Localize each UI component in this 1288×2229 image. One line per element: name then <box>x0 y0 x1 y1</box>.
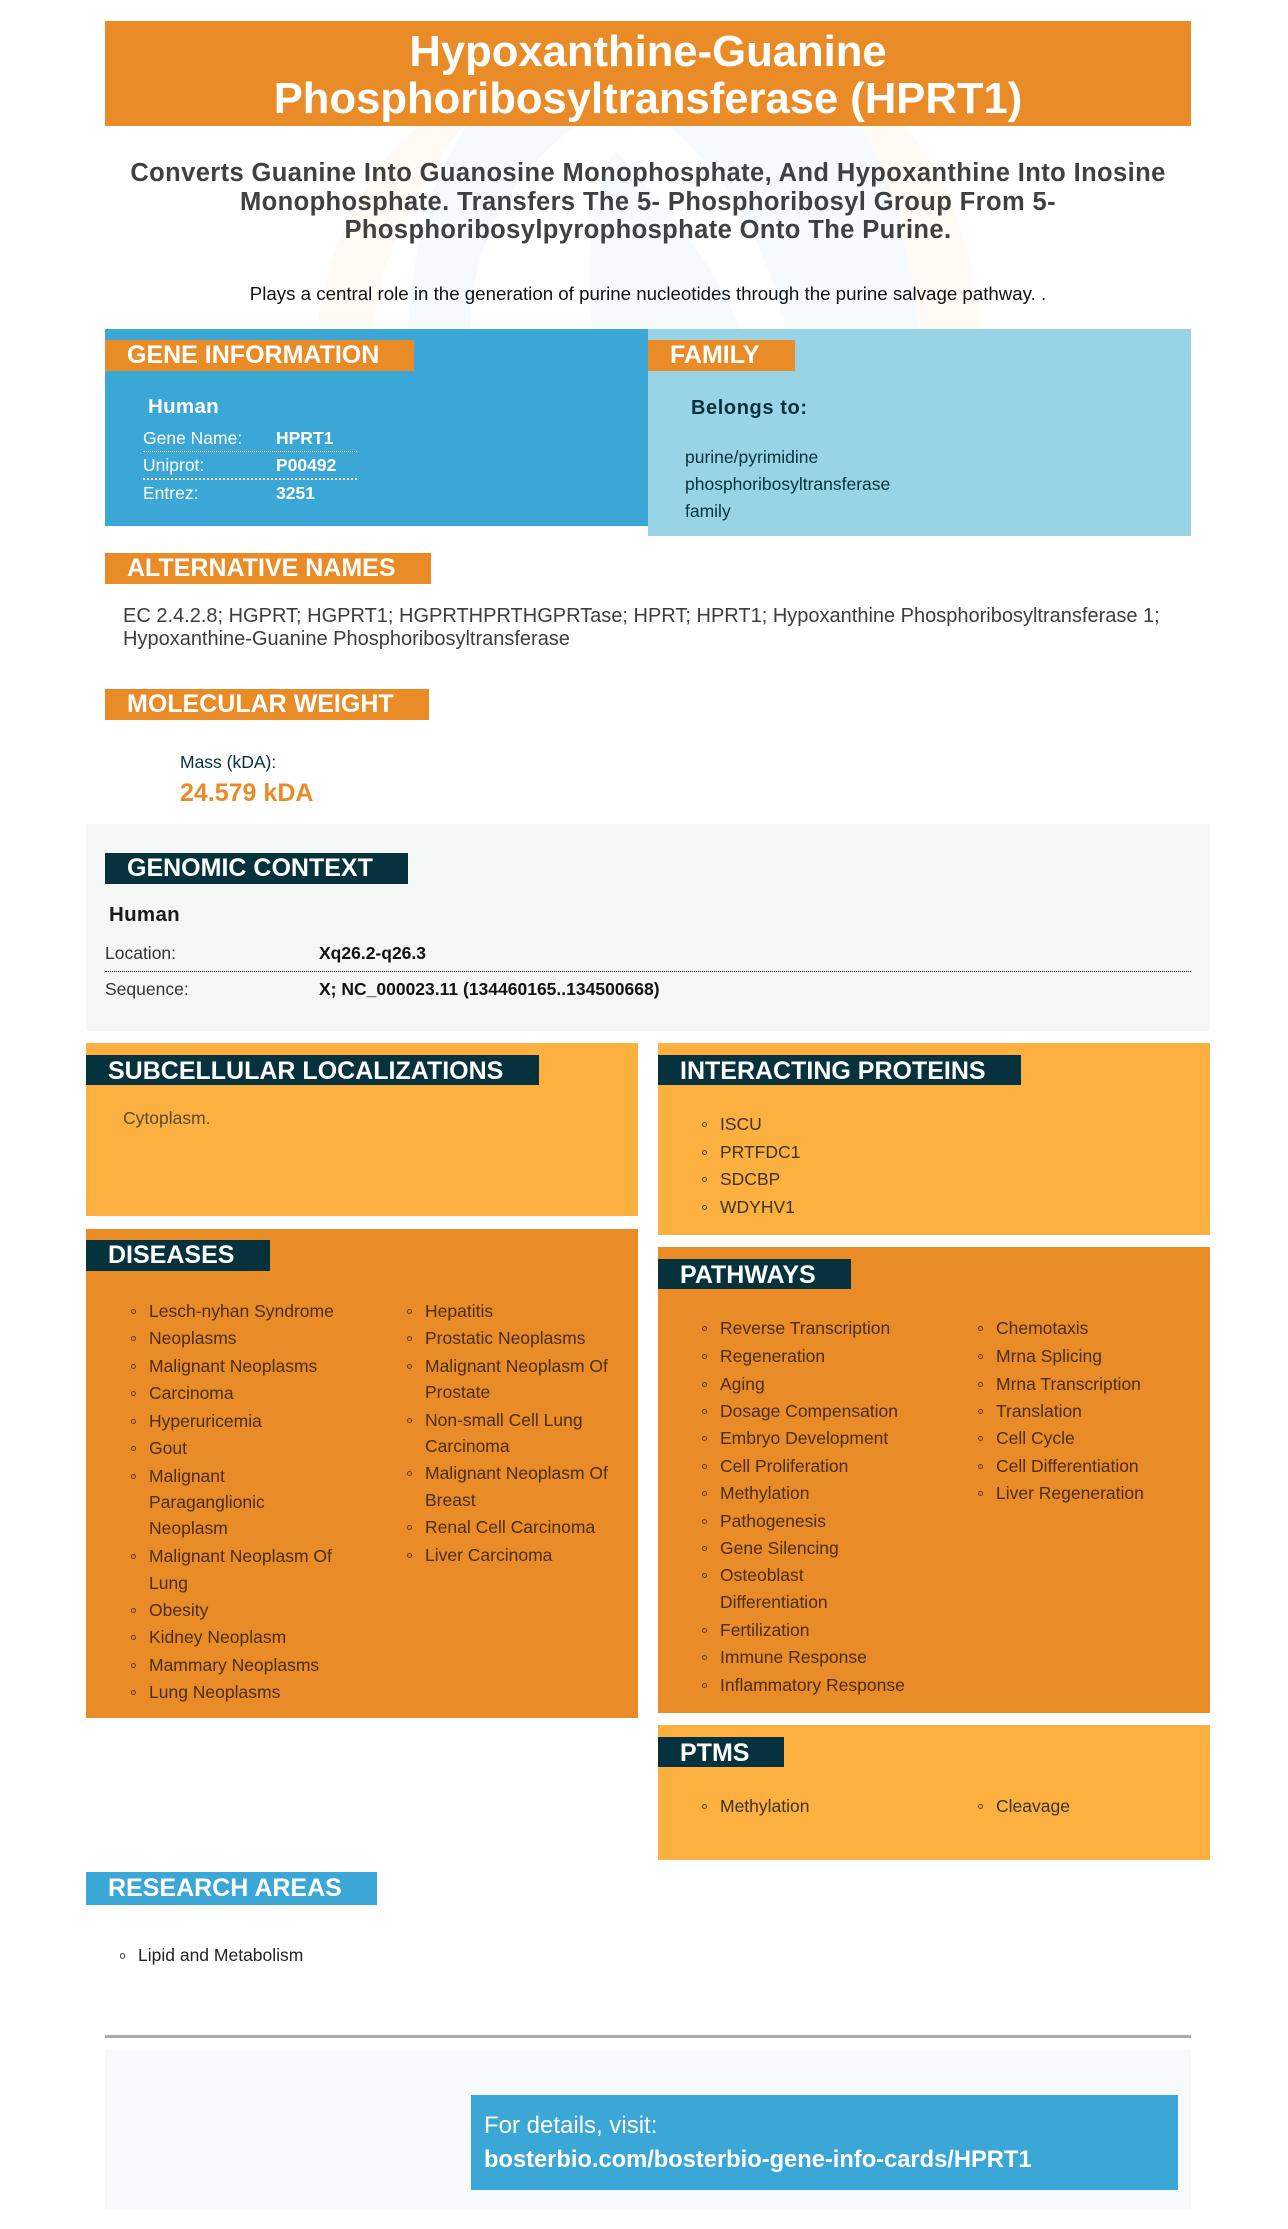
subtitle <box>130 159 1166 244</box>
alternative names text: EC 2.4.2.8; HGPRT; HGPRT1; HGPRTHPRTHGPRTase; HPRT; HPRT1; Hypoxanthine Phosphoribosyltransferase 1; <box>123 605 1160 627</box>
callout: visit link: bosterbio.com/bosterbio-gene-info-cards/HPRT1 <box>484 2147 1032 2173</box>
disease list: Malignant <box>149 1466 225 1486</box>
heading: diseases: DISEASES <box>108 1241 234 1269</box>
disease list: Kidney Neoplasm <box>149 1626 286 1646</box>
pathway list: Pathogenesis <box>720 1510 826 1530</box>
pathway list: Cell Proliferation <box>720 1456 848 1476</box>
callout: visit link: For details, visit: <box>484 2112 657 2139</box>
gene table: Gene Name: <box>143 428 242 448</box>
pathway list <box>702 1318 1144 1694</box>
disease list: Malignant Neoplasm Of <box>425 1462 608 1482</box>
subtitle: Phosphoribosylpyrophosphate Onto The Purine. <box>345 216 951 244</box>
heading: alternative names: ALTERNATIVE NAMES <box>127 554 396 582</box>
research list: Lipid and Metabolism <box>138 1945 303 1965</box>
disease list: Carcinoma <box>425 1436 510 1456</box>
disease list: Obesity <box>149 1600 208 1620</box>
panel: subcellular localizations <box>86 1043 638 1216</box>
heading: family <box>648 340 795 371</box>
title: Phosphoribosyltransferase (HPRT1) <box>274 74 1022 122</box>
pathway list: Translation <box>996 1400 1082 1420</box>
disease list: Breast <box>425 1490 476 1510</box>
pathway list: Embryo Development <box>720 1428 888 1448</box>
callout: visit link <box>471 2095 1178 2190</box>
disease list <box>131 1300 608 1702</box>
disease list: Lung <box>149 1572 188 1592</box>
species: Human <box>109 902 180 926</box>
subtitle: Monophosphate. Transfers The 5- Phosphoribosyl Group From 5- <box>240 188 1056 216</box>
disease list: Lung Neoplasms <box>149 1682 280 1702</box>
pathway list: Osteoblast <box>720 1564 804 1584</box>
heading: gene information: GENE INFORMATION <box>127 341 379 369</box>
family text <box>685 446 890 521</box>
pathway list: Differentiation <box>720 1592 828 1612</box>
belongs to: Belongs to: <box>691 396 808 418</box>
protein list: SDCBP <box>720 1168 780 1188</box>
heading: family: FAMILY <box>670 341 759 369</box>
panel: footer <box>105 2050 1191 2209</box>
panel: genomic context: X; NC_000023.11 (134460165..134500668) <box>319 978 660 998</box>
pathway list: Methylation <box>720 1482 810 1502</box>
protein list: ISCU <box>720 1114 762 1134</box>
family text: phosphoribosyltransferase <box>685 474 890 494</box>
ptm list <box>702 1796 1070 1816</box>
ptm list: Cleavage <box>996 1796 1070 1816</box>
mass value: 24.579 kDA <box>180 779 313 807</box>
pathway list: Liver Regeneration <box>996 1482 1144 1502</box>
heading: ptms <box>658 1737 784 1767</box>
heading: ptms: PTMS <box>680 1739 749 1767</box>
alternative names text <box>123 605 1160 650</box>
panel: ptms <box>658 1725 1210 1860</box>
pathway list: Chemotaxis <box>996 1318 1088 1338</box>
location: Location: <box>105 943 176 963</box>
title: Hypoxanthine-Guanine <box>409 28 887 76</box>
disease list: Malignant Neoplasm Of <box>425 1356 608 1376</box>
pathway list: Gene Silencing <box>720 1538 839 1558</box>
protein list: WDYHV1 <box>720 1196 795 1216</box>
panel: diseases <box>86 1229 638 1718</box>
disease list: Neoplasms <box>149 1328 237 1348</box>
panel: family <box>648 329 1191 536</box>
pathway list: Fertilization <box>720 1620 809 1640</box>
heading: interacting proteins: INTERACTING PROTEINS <box>680 1057 986 1085</box>
heading: pathways <box>658 1259 851 1289</box>
mass value: Mass (kDA): <box>180 752 276 772</box>
gene table: HPRT1 <box>276 428 333 448</box>
pathway list: Inflammatory Response <box>720 1674 905 1694</box>
protein list: PRTFDC1 <box>720 1142 800 1162</box>
localization text: Cytoplasm. <box>123 1108 211 1128</box>
alternative names text: Hypoxanthine-Guanine Phosphoribosyltransferase <box>123 628 570 650</box>
panel: genomic context: Xq26.2-q26.3 <box>319 943 426 963</box>
disease list: Gout <box>149 1438 187 1458</box>
pathway list: Cell Cycle <box>996 1428 1075 1448</box>
disease list: Non-small Cell Lung <box>425 1410 583 1430</box>
disease list: Malignant Neoplasms <box>149 1356 317 1376</box>
species: Human <box>148 395 219 418</box>
disease list: Paraganglionic <box>149 1492 265 1512</box>
ptm list: Methylation <box>720 1796 810 1816</box>
pathway list: Immune Response <box>720 1646 867 1666</box>
disease list: Carcinoma <box>149 1382 234 1402</box>
watermark logo <box>317 126 980 329</box>
panel: gene information <box>105 329 648 526</box>
disease list: Liver Carcinoma <box>425 1544 552 1564</box>
heading: diseases <box>86 1240 270 1271</box>
heading: pathways: PATHWAYS <box>680 1261 816 1289</box>
disease list: Lesch-nyhan Syndrome <box>149 1300 334 1320</box>
description: Plays a central role in the generation of purine nucleotides through the purine salvage pathway. . <box>250 282 1046 304</box>
disease list: Prostate <box>425 1382 490 1402</box>
disease list: Neoplasm <box>149 1518 228 1538</box>
title <box>105 21 1191 126</box>
pathway list: Mrna Splicing <box>996 1346 1102 1366</box>
heading: research areas <box>86 1872 377 1905</box>
gene table <box>143 428 357 502</box>
panel: genomic context <box>86 824 1210 1031</box>
heading: genomic context: GENOMIC CONTEXT <box>127 854 373 882</box>
gene table: Uniprot: <box>143 454 204 474</box>
protein list <box>702 1114 800 1216</box>
heading: research areas: RESEARCH AREAS <box>108 1874 342 1902</box>
pathway list: Dosage Compensation <box>720 1400 898 1420</box>
heading: molecular weight: MOLECULAR WEIGHT <box>127 690 394 718</box>
disease list: Mammary Neoplasms <box>149 1654 319 1674</box>
pathway list: Reverse Transcription <box>720 1318 890 1338</box>
gene table: P00492 <box>276 454 336 474</box>
subtitle: Converts Guanine Into Guanosine Monophosphate, And Hypoxanthine Into Inosine <box>130 159 1166 187</box>
family text: purine/pyrimidine <box>685 446 818 466</box>
sequence: Sequence: <box>105 978 189 998</box>
disease list: Hyperuricemia <box>149 1410 262 1430</box>
divider <box>105 2035 1191 2038</box>
panel: interacting proteins <box>658 1043 1210 1235</box>
gene table: 3251 <box>276 482 315 502</box>
mass value <box>180 752 313 807</box>
heading: subcellular localizations: SUBCELLULAR LOCALIZATIONS <box>108 1057 503 1085</box>
gene table: Entrez: <box>143 482 198 502</box>
pathway list: Regeneration <box>720 1346 825 1366</box>
pathway list: Cell Differentiation <box>996 1456 1139 1476</box>
disease list: Prostatic Neoplasms <box>425 1328 585 1348</box>
pathway list: Aging <box>720 1374 765 1394</box>
panel: pathways <box>658 1247 1210 1713</box>
pathway list: Mrna Transcription <box>996 1374 1141 1394</box>
family text: family <box>685 501 731 521</box>
disease list: Malignant Neoplasm Of <box>149 1546 332 1566</box>
disease list: Renal Cell Carcinoma <box>425 1516 595 1536</box>
disease list: Hepatitis <box>425 1300 493 1320</box>
